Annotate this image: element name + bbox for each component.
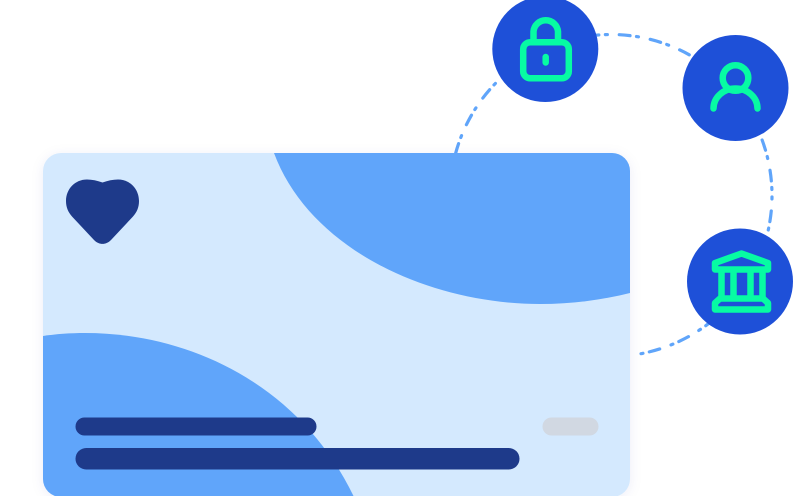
card bottom-left wave [43, 333, 354, 496]
icon: lock [492, 0, 598, 102]
card long number bar [76, 448, 520, 470]
card short name bar [76, 418, 316, 436]
icon: person [682, 35, 788, 141]
icon: heart [66, 180, 139, 244]
card top-right wave [274, 153, 630, 304]
dashed connection ring [450, 34, 772, 356]
panel: card [43, 153, 630, 496]
card grey chip bar [542, 418, 598, 436]
icon: bank [687, 228, 793, 334]
